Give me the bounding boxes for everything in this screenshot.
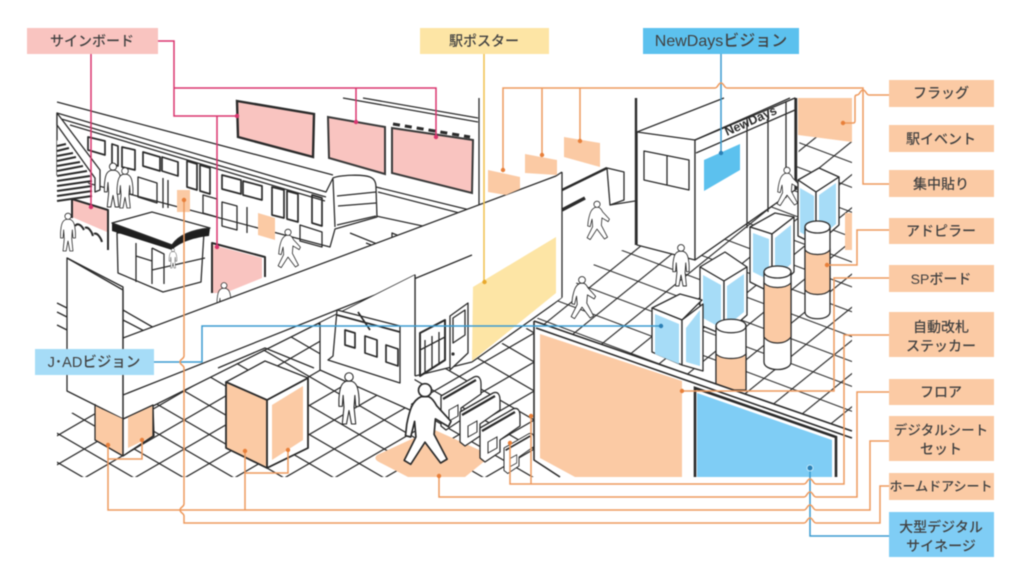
station concourse illustration bbox=[57, 98, 852, 477]
signboard: left wall panel bbox=[237, 101, 314, 157]
label: floor bbox=[889, 379, 994, 405]
ticket machine room bbox=[320, 275, 415, 424]
label: station event bbox=[889, 125, 994, 152]
passenger on platform right bbox=[278, 229, 300, 268]
NewDays store bbox=[636, 98, 796, 260]
label: ad pillar: アドピラー bbox=[906, 223, 976, 239]
back corridor passengers bbox=[587, 201, 609, 240]
NewDays store sign: NewDays bbox=[723, 103, 779, 139]
label: flag bbox=[889, 80, 994, 107]
cylinder pillar 2 bbox=[764, 266, 791, 370]
stairs bbox=[57, 113, 100, 202]
label: NewDays vision: NewDaysビジョン bbox=[655, 32, 787, 50]
pillar left bbox=[67, 258, 154, 456]
label: signboard: サインボード bbox=[50, 33, 134, 49]
digital signage frame bbox=[695, 388, 836, 477]
label: J-AD vision bbox=[35, 349, 154, 375]
label: gate sticker: ステッカー bbox=[906, 338, 976, 354]
flag posters bbox=[488, 137, 600, 195]
front wall with panels bbox=[534, 321, 852, 477]
label: signboard bbox=[27, 28, 158, 54]
label: large digital signage: 大型デジタル bbox=[899, 519, 983, 535]
label: large digital signage: サイネージ bbox=[906, 538, 976, 554]
leader lines: blue digital bbox=[154, 54, 889, 536]
label: digital sheet set: セット bbox=[920, 441, 962, 457]
label: home door sheet: ホームドアシート bbox=[889, 479, 993, 494]
label: NewDays vision bbox=[643, 28, 799, 54]
doors bbox=[420, 303, 468, 376]
leader lines: flag, event, concentrated posters bbox=[501, 83, 889, 184]
label: station event: 駅イベント bbox=[906, 131, 976, 147]
back wall with ceiling lines bbox=[57, 98, 479, 217]
signboard: right wall panel with lights bbox=[392, 124, 473, 193]
label: SP board: SPボード bbox=[911, 271, 971, 287]
label: J-AD vision: J･ADビジョン bbox=[48, 354, 140, 371]
left floor bits behind pillar bbox=[57, 303, 156, 335]
leader line: station poster bbox=[482, 54, 487, 284]
label: large digital signage bbox=[889, 512, 994, 557]
left floor tiles bbox=[56, 323, 534, 478]
cylinder pillar 1 bbox=[716, 319, 746, 390]
label: digital sheet set: デジタルシート bbox=[894, 422, 988, 438]
leader line: home door sheet bbox=[180, 198, 892, 523]
right floor tiles bbox=[534, 135, 852, 435]
label: gate sticker bbox=[889, 312, 994, 357]
ad pillar 3 bbox=[750, 213, 794, 293]
event wall panel bbox=[798, 98, 852, 142]
corridor fence bbox=[562, 168, 635, 210]
label: digital sheet set bbox=[889, 416, 994, 461]
label: ad pillar bbox=[889, 218, 994, 244]
floor poster large panel bbox=[540, 334, 682, 477]
ticket gates bbox=[441, 376, 534, 474]
label: gate sticker: 自動改札 bbox=[913, 319, 969, 335]
cylinder pillar 3 bbox=[805, 221, 830, 319]
label: station poster: 駅ポスター bbox=[449, 33, 519, 49]
signboard: platform standing sign bbox=[212, 243, 265, 318]
leader lines: digital sheet set bbox=[106, 438, 889, 510]
side wall sticker strip bbox=[845, 213, 852, 250]
free-standing pillar cube bbox=[218, 348, 314, 468]
ad pillar 4 bbox=[798, 168, 839, 245]
label: SP board bbox=[889, 265, 994, 292]
leader lines: gate sticker bbox=[508, 335, 889, 484]
label: station poster bbox=[420, 28, 549, 54]
leader line: floor bbox=[437, 392, 889, 497]
train side sticker posters bbox=[177, 190, 275, 240]
J-AD vision pillar 1 bbox=[652, 294, 703, 371]
foreground walker bbox=[404, 384, 451, 464]
label: home door sheet bbox=[889, 473, 994, 500]
platform kiosk bbox=[112, 212, 210, 292]
signboard: centre wall panel bbox=[328, 117, 385, 174]
signboard: platform bench sign bbox=[72, 199, 108, 250]
store passengers bbox=[571, 167, 799, 319]
train bbox=[57, 113, 377, 247]
leader lines: ad pillar and SP board bbox=[680, 230, 889, 393]
label: concentrated posting: 集中貼り bbox=[913, 176, 969, 192]
passengers on platform bbox=[61, 163, 133, 251]
label: floor: フロア bbox=[920, 384, 962, 400]
ad pillar 2 bbox=[700, 252, 747, 335]
large digital signage screen bbox=[697, 393, 832, 477]
poster: yellow wall poster bbox=[472, 237, 556, 361]
NewDays vision screen bbox=[704, 144, 740, 191]
label: flag: フラッグ bbox=[913, 85, 969, 101]
label: concentrated posting bbox=[889, 170, 994, 197]
floor mat bbox=[375, 430, 488, 477]
leader lines: signboard bbox=[89, 41, 438, 249]
train tracks bbox=[350, 216, 446, 263]
ceiling beam and wall bbox=[123, 172, 564, 419]
